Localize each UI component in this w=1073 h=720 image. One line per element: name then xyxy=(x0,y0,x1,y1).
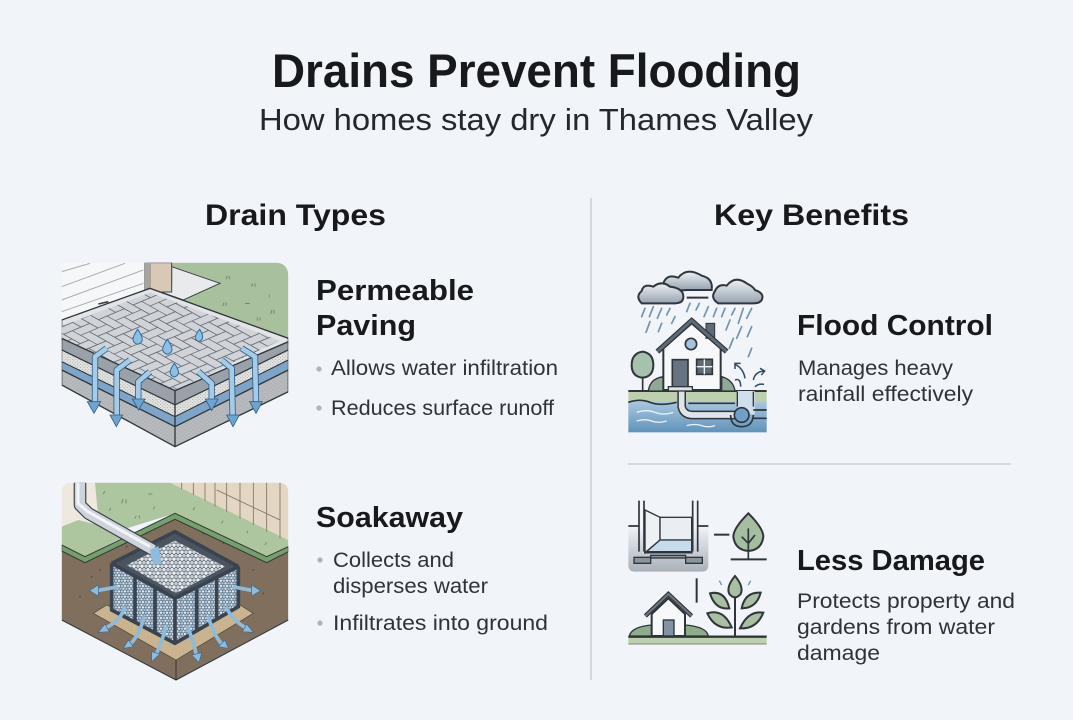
text: less damage: gardens from water xyxy=(797,615,995,639)
water drops xyxy=(133,329,203,377)
bullets: permeable paving: Allows water infiltration xyxy=(331,356,558,380)
house xyxy=(663,323,721,390)
text: less damage xyxy=(797,589,1015,665)
heading: soakaway: Soakaway xyxy=(316,502,463,534)
arrows: infiltration xyxy=(95,348,256,417)
tree xyxy=(640,368,645,392)
clouds xyxy=(638,272,762,303)
bullets: permeable paving: Reduces surface runoff xyxy=(331,396,554,420)
bullets: soakaway: Infiltrates into ground xyxy=(333,611,548,635)
illustration: soakaway xyxy=(62,483,288,680)
text: flood control xyxy=(798,356,973,406)
rain xyxy=(642,303,752,357)
subtitle: How homes stay dry in Thames Valley xyxy=(259,102,814,137)
ground and water xyxy=(628,391,767,402)
heading: less damage: Less Damage xyxy=(797,545,985,577)
arrows: water rising xyxy=(735,363,765,387)
illustration: permeable paving xyxy=(62,263,288,447)
bullets: soakaway: disperses water xyxy=(333,574,488,598)
arrows: dispersal xyxy=(97,587,253,657)
heading: permeable paving: Paving xyxy=(316,310,416,342)
bushes xyxy=(648,377,735,391)
pipe xyxy=(78,483,153,550)
tree xyxy=(733,513,763,551)
heading: key benefits: Key Benefits xyxy=(714,199,909,232)
ground xyxy=(628,636,767,644)
house xyxy=(652,598,685,636)
title: Drains Prevent Flooding xyxy=(272,44,801,97)
heading: permeable paving: Permeable xyxy=(316,275,474,307)
bushes xyxy=(629,625,708,636)
bullets: permeable paving xyxy=(316,356,558,420)
text: less damage: damage xyxy=(797,641,880,665)
drain pipe xyxy=(682,392,735,415)
plant xyxy=(707,576,763,628)
text: flood control: rainfall effectively xyxy=(798,382,973,406)
icon: flood control house xyxy=(628,272,767,432)
text: flood control: Manages heavy xyxy=(798,356,953,380)
foundation xyxy=(628,526,708,572)
bullets: soakaway: Collects and xyxy=(333,548,454,572)
icon: less damage xyxy=(628,501,767,644)
text: less damage: Protects property and xyxy=(797,589,1015,613)
heading: drain types: Drain Types xyxy=(205,199,386,232)
bullets: soakaway xyxy=(317,548,548,635)
heading: flood control: Flood Control xyxy=(797,310,993,342)
